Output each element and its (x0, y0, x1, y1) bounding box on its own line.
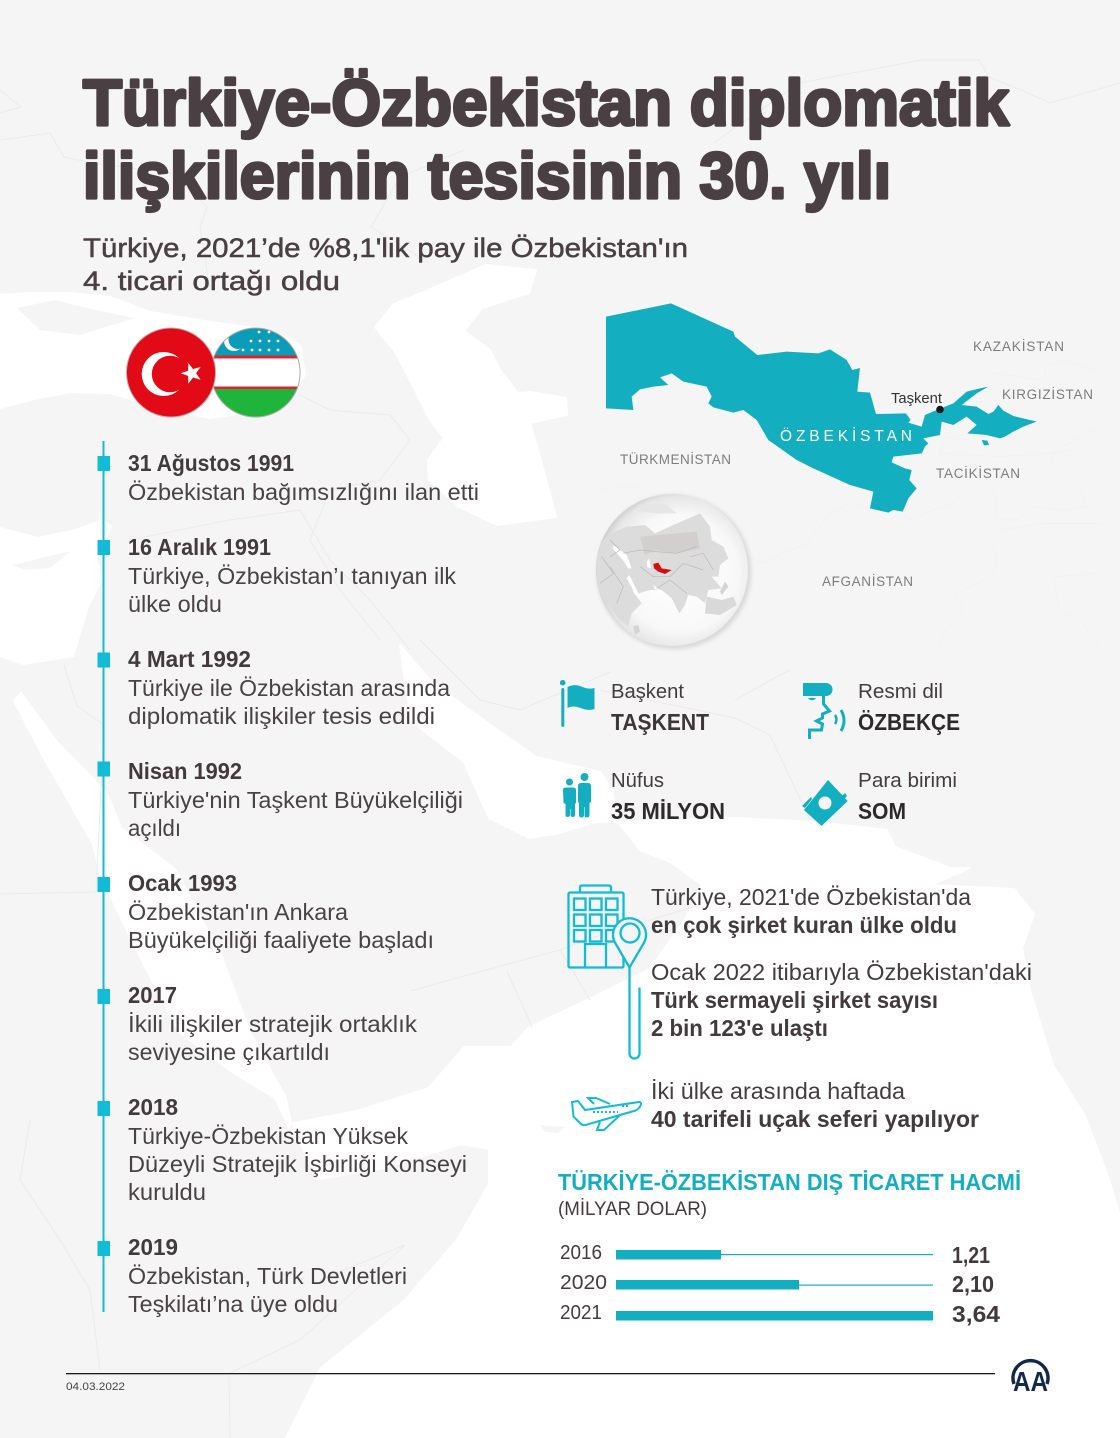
event: 4 Mart 1992: 4 Mart 1992 (128, 646, 251, 672)
flights text block (651, 1078, 979, 1132)
flag: Turkey (126, 328, 216, 417)
flags: Uzbekistan and Turkey (126, 325, 305, 419)
chart heading: TÜRKİYE-ÖZBEKİSTAN DIŞ TİCARET HACMİ (558, 1169, 1021, 1195)
icon: speaking head (803, 683, 844, 739)
company text block: 2 bin 123'e ulaştı (651, 1015, 828, 1041)
neighbouring country labels: TÜRKMENİSTAN (620, 452, 731, 467)
event: Nisan 1992: Türkiye'nin Taşkent Büyükelçiliği (128, 787, 463, 813)
event: 2017: İkili ilişkiler stratejik ortaklık (128, 1011, 418, 1037)
event: Nisan 1992: Nisan 1992 (128, 758, 242, 784)
bar: 2016: 1,21 (952, 1242, 990, 1268)
event: Nisan 1992: açıldı (128, 815, 181, 841)
event: 16 Aralık 1991: Türkiye, Özbekistan’ı tanıyan ilk (128, 563, 457, 589)
flights text block: İki ülke arasında haftada (651, 1078, 905, 1104)
info: currency: Para birimi (858, 769, 957, 792)
event: 2018: Düzeyli Stratejik İşbirliği Konseyi (128, 1151, 467, 1177)
info: population: Nüfus (611, 769, 664, 792)
globe locator (595, 494, 751, 649)
event: Nisan 1992 (128, 758, 463, 841)
event: 2019: Özbekistan, Türk Devletleri (128, 1263, 407, 1289)
neighbouring country labels: AFGANİSTAN (822, 574, 913, 589)
event: 2019: Teşkilatı’na üye oldu (128, 1291, 338, 1317)
subtitle (83, 233, 688, 296)
icon: building with location pin (568, 886, 646, 1058)
info: currency: SOM (858, 798, 906, 824)
neighbouring country labels: TACİKİSTAN (936, 466, 1020, 481)
title: Türkiye-Özbekistan diplomatik (83, 66, 1010, 139)
bar: 2020 (560, 1271, 994, 1297)
event: 2019: 2019 (128, 1234, 178, 1260)
label: ÖZBEKİSTAN: ÖZBEKİSTAN (780, 427, 912, 445)
event: 4 Mart 1992 (128, 646, 450, 729)
info: capital: TAŞKENT (611, 709, 710, 735)
event: 31 Ağustos 1991: 31 Ağustos 1991 (128, 450, 294, 476)
footer (66, 1361, 1048, 1397)
title: ilişkilerinin tesisinin 30. yılı (83, 139, 891, 212)
title (83, 66, 1010, 212)
info: capital (560, 680, 710, 735)
icon: flag (560, 680, 594, 727)
company text block: Ocak 2022 itibarıyla Özbekistan'daki (651, 959, 1032, 985)
chart: foreign trade volume (558, 1169, 1021, 1327)
bar: 2021 (560, 1301, 1000, 1327)
info: population (563, 769, 725, 824)
neighbouring country labels: KIRGIZİSTAN (1002, 387, 1093, 402)
event: 31 Ağustos 1991 (128, 450, 479, 505)
company text block: Türk sermayeli şirket sayısı (651, 987, 938, 1013)
chart unit: (MİLYAR DOLAR) (558, 1199, 707, 1220)
event: Ocak 1993: Büyükelçiliği faaliyete başladı (128, 927, 434, 953)
capital marker: Taşkent: Taşkent (891, 391, 942, 407)
icon: banknote (802, 780, 848, 826)
bar: 2020: 2020 (560, 1271, 607, 1294)
bar: 2021: 3,64 (952, 1301, 1000, 1327)
event: 2018: 2018 (128, 1094, 178, 1120)
event: 4 Mart 1992: diplomatik ilişkiler tesis edildi (128, 703, 435, 729)
logo: AA: AA (1013, 1366, 1048, 1397)
event: Ocak 1993: Özbekistan'ın Ankara (128, 899, 348, 925)
info: population: 35 MİLYON (611, 798, 725, 824)
timeline (98, 441, 479, 1317)
date: 04.03.2022 (66, 1381, 125, 1393)
event: 2018: kuruldu (128, 1179, 206, 1205)
event: 2017 (128, 982, 418, 1065)
event: 2019 (128, 1234, 407, 1317)
info: currency (802, 769, 957, 826)
event: 16 Aralık 1991: 16 Aralık 1991 (128, 534, 271, 560)
info: language: Resmi dil (858, 680, 943, 703)
event: Ocak 1993: Ocak 1993 (128, 870, 237, 896)
capital marker: Taşkent (891, 391, 944, 413)
event: 2017: 2017 (128, 982, 177, 1008)
event: 31 Ağustos 1991: Özbekistan bağımsızlığını ilan etti (128, 479, 479, 505)
event: 2018 (128, 1094, 467, 1205)
bar: 2016 (560, 1241, 990, 1268)
company text block: Türkiye, 2021'de Özbekistan'da (651, 884, 971, 910)
info: capital: Başkent (611, 680, 684, 703)
event: 2017: seviyesine çıkartıldı (128, 1039, 330, 1065)
company text block (651, 884, 1032, 1041)
event: 4 Mart 1992: Türkiye ile Özbekistan arasında (128, 675, 450, 701)
info: language: ÖZBEKÇE (858, 709, 960, 735)
event: 2018: Türkiye-Özbekistan Yüksek (128, 1123, 409, 1149)
bar: 2016: 2016 (560, 1241, 602, 1264)
company text block: en çok şirket kuran ülke oldu (651, 912, 957, 938)
map: Uzbekistan (606, 303, 1093, 589)
flights text block: 40 tarifeli uçak seferi yapılıyor (651, 1106, 979, 1132)
flag: Uzbekistan (213, 328, 301, 418)
event: Ocak 1993 (128, 870, 434, 953)
event: 16 Aralık 1991: ülke oldu (128, 591, 222, 617)
icon: people (563, 773, 591, 818)
neighbouring country labels (620, 339, 1093, 589)
neighbouring country labels: KAZAKİSTAN (973, 339, 1064, 354)
bar: 2021: 2021 (560, 1301, 602, 1324)
bar: 2020: 2,10 (952, 1271, 994, 1297)
subtitle: 4. ticari ortağı oldu (83, 266, 340, 296)
event: 16 Aralık 1991 (128, 534, 457, 617)
icon: airplane (572, 1098, 641, 1130)
info: language (803, 680, 960, 739)
subtitle: Türkiye, 2021’de %8,1'lik pay ile Özbekistan'ın (83, 233, 688, 263)
